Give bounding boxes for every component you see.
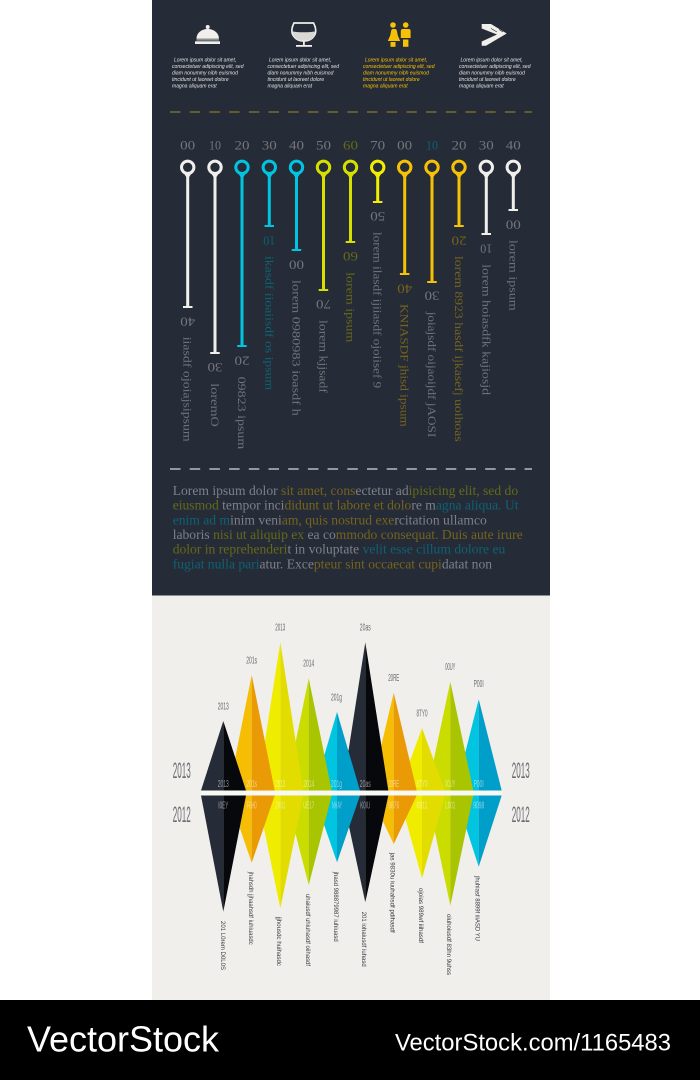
text block: column 1: consectetuer adipiscing elit, sed: [172, 64, 244, 70]
pin 11: lorem 8923 hasdf ijkasefj uoihoas: [452, 256, 466, 442]
pin chart: vertical timeline: [180, 138, 521, 450]
text block: column 1: magna aliquam erat: [172, 84, 217, 90]
pin 8: [370, 138, 385, 388]
labels: above peaks: 2013: [275, 622, 285, 634]
pin 1: 40: [180, 314, 195, 330]
pin 4: [262, 138, 277, 391]
pin 3: 09823 ipsum: [235, 377, 249, 450]
text block: column 3 highlighted: diam nonummy nibh euismod: [363, 70, 429, 76]
pin 3: 20: [234, 138, 250, 152]
labels: inside lower triangles: L001: [445, 800, 455, 812]
labels: inside upper triangles: 201s: [246, 779, 257, 790]
labels: rotated descriptions: 201 iohaiusdf iuhasd: [360, 912, 367, 967]
pin 10: joiajsdf oijaoijdf jAOSI: [425, 311, 439, 437]
text block: column 3 highlighted: [363, 58, 435, 90]
text block: column 4: consectetuer adipiscing elit, sed: [459, 64, 531, 70]
text block: column 2: magna aliquam erat: [268, 84, 313, 90]
labels: above peaks: 2013: [218, 702, 229, 712]
labels: inside lower triangles: 2X01: [275, 800, 285, 812]
panel: light chart: [152, 596, 550, 1000]
text block: paragraph: laboris nisi ut aliquip ex ea commodo consequat. Duis aute irure: [173, 527, 523, 542]
labels: above peaks: 201s: [246, 656, 257, 666]
labels: inside upper triangles: 20as: [360, 779, 371, 790]
text block: column 2: tincidunt ut laoreet dolore: [268, 77, 324, 83]
text block: column 4: magna aliquam erat: [459, 84, 504, 90]
pin 12: 10: [480, 242, 492, 257]
text block: column 2: [268, 58, 339, 90]
text block: column 1: [172, 58, 244, 90]
text block: column 1: tincidunt ut laoreet dolore: [172, 77, 229, 83]
labels: rotated descriptions: jas 9830u iuuhahsdf pdihasdf: [389, 852, 396, 933]
pin 10: 10: [426, 138, 438, 152]
pin 13: 40: [506, 138, 521, 152]
chart: lower triangles 2012: [201, 796, 502, 912]
pin 2: 10: [209, 138, 221, 152]
pin 1: [180, 138, 195, 442]
pin 2: loremO: [208, 383, 222, 427]
labels: rotated descriptions: jjhousdc huihasdc: [275, 916, 282, 967]
pin 6: 70: [316, 297, 331, 312]
panel: light chart: P00I: [474, 679, 484, 690]
pin 12: [479, 138, 494, 395]
labels: inside lower triangles: [218, 800, 484, 812]
pin 13: 00: [506, 217, 521, 232]
pin 6: 50: [316, 138, 331, 152]
pin 7: [343, 138, 358, 343]
pin 8: 50: [370, 209, 385, 224]
pin 4: 10: [263, 234, 275, 249]
labels: above peaks: 2014: [303, 658, 314, 670]
pin 5: lorem 0980983 ioasdf h: [290, 280, 304, 416]
panel: light chart: 2012: [512, 802, 530, 827]
labels: rotated descriptions: 201 L0rem D0L0S: [219, 921, 226, 970]
pin 13: lorem ipsum: [506, 240, 520, 311]
pin 5: 40: [289, 138, 304, 152]
text block: column 4: [459, 58, 531, 90]
text block: column 3 highlighted: consectetuer adipiscing elit, sed: [363, 64, 435, 70]
text block: paragraph: Lorem ipsum dolor sit amet, consectetur adipisicing elit, sed do: [173, 483, 518, 498]
pin 8: lorem ilasdf ijiiasdf ojoiisef 9: [371, 232, 385, 388]
pin 9: [397, 138, 412, 427]
pin 2: 30: [208, 360, 222, 375]
text block: column 1: Lorem ipsum dolor sit amet,: [174, 58, 236, 64]
pin 5: [289, 138, 304, 416]
pin 2: [208, 138, 222, 427]
icon: stairs: [482, 24, 507, 46]
labels: above peaks: 201g: [331, 692, 342, 704]
pin 11: [452, 138, 466, 442]
labels: above peaks: 8TY0: [416, 708, 428, 720]
pin 9: 40: [397, 281, 412, 296]
text block: column 1: diam nonummy nibh euismod: [172, 70, 238, 76]
pin 13: [506, 138, 521, 311]
text block: column 2: consectetuer adipiscing elit, sed: [268, 64, 339, 70]
labels: inside lower triangles: I0EY: [218, 800, 228, 812]
labels: above peaks: 00UY: [445, 662, 455, 673]
text block: column 3 highlighted: magna aliquam erat: [363, 84, 408, 90]
panel: light chart: 2012: [173, 802, 191, 827]
pin 5: 00: [289, 257, 304, 272]
pin 11: 20: [452, 138, 466, 152]
labels: rotated descriptions: ojoias 989wf iiihasdf: [417, 888, 424, 943]
pin 11: 20: [452, 234, 466, 249]
labels: rotated descriptions: oiuhoiusdf 83hn 9uhss: [445, 914, 452, 975]
pin 4: ikasdf iioaiisdf os ipsum: [262, 256, 276, 391]
footer url text: VectorStock.com/1165483: [395, 1030, 671, 1057]
pin 12: 30: [479, 138, 494, 152]
labels: inside lower triangles: UE17: [303, 800, 314, 812]
icon: wine glass: [292, 23, 316, 47]
text block: column 2: Lorem ipsum dolor sit amet,: [269, 58, 331, 64]
text block: column 2: diam nonummy nibh euismod: [268, 70, 334, 76]
labels: inside upper triangles: 2014: [303, 779, 314, 790]
labels: inside upper triangles: 20RE: [388, 779, 399, 790]
pin 7: 60: [343, 249, 358, 264]
pin 3: [234, 138, 250, 450]
labels: rotated descriptions: jhahsdh jjhaahsdf iuhiuasdc: [247, 871, 254, 945]
pin 6: lorem kjjsadf: [316, 320, 330, 393]
labels: rotated descriptions: [219, 852, 481, 975]
panel: light chart: 2013: [173, 758, 191, 783]
pin 9: KNIASDF jhisd ipsum: [398, 304, 412, 427]
labels: rotated descriptions: jhuhiasf 8899f iiiASD YU: [474, 875, 481, 941]
labels: inside lower triangles: 9098: [473, 800, 484, 812]
labels: rotated descriptions: uhaiusdf uhiuhasdf oiihasdf: [304, 894, 311, 966]
text block: paragraph: eiusmod tempor incididunt ut labore et dolore magna aliqua. Ut: [173, 498, 519, 513]
pin 4: 30: [262, 138, 277, 152]
text block: paragraph: dolor in reprehenderit in voluptate velit esse cillum dolore eu: [173, 542, 505, 557]
labels: inside upper triangles: 8TY0: [416, 779, 428, 790]
pin 3: 20: [234, 354, 250, 369]
labels: inside lower triangles: 0911: [416, 800, 428, 812]
pin 1: iiasdf ojoiajsipsum: [181, 337, 195, 442]
pin 7: lorem ipsum: [344, 272, 358, 343]
text block: column 4: diam nonummy nibh euismod: [459, 70, 525, 76]
labels: above peaks: 20as: [360, 622, 371, 634]
labels: inside lower triangles: NHAY: [332, 800, 342, 812]
text block: paragraph: fugiat nulla pariatur. Excepteur sint occaecat cupidatat non: [173, 556, 492, 571]
pin 8: 70: [370, 138, 385, 152]
icon: man and woman: [388, 22, 411, 47]
pin 10: 30: [424, 289, 440, 304]
text block: column 4: tincidunt ut laoreet dolore: [459, 77, 516, 83]
footer: watermark bar: [0, 1000, 700, 1080]
panel: light chart: P00I: [474, 779, 484, 790]
text block: paragraph: [173, 483, 523, 571]
labels: inside upper triangles: 2013: [218, 779, 229, 790]
panel: light chart: 2013: [512, 758, 530, 783]
labels: inside upper triangles: 201g: [331, 779, 342, 790]
footer logo text: VectorStock: [27, 1018, 220, 1060]
labels: inside upper triangles: [218, 779, 484, 790]
pin 9: 00: [397, 138, 412, 152]
pin 12: lorem hoiasdfk kajiosjd: [479, 264, 493, 395]
labels: inside lower triangles: F6H0: [247, 800, 257, 812]
panel: dark top: [152, 0, 550, 596]
labels: above peaks: [218, 622, 484, 720]
labels: inside upper triangles: 2013: [275, 779, 285, 790]
pin 1: 00: [180, 138, 195, 152]
labels: inside lower triangles: K0IU: [360, 800, 370, 812]
labels: rotated descriptions: jhasd 988879987 iuhiuasd: [332, 871, 339, 942]
text block: column 3 highlighted: tincidunt ut laoreet dolore: [363, 77, 420, 83]
chart: upper triangles 2013: [201, 642, 502, 790]
icon: cloche: [195, 25, 220, 44]
pin 10: [424, 138, 440, 437]
text block: column 3 highlighted: Lorem ipsum dolor sit amet,: [365, 58, 427, 64]
text block: paragraph: enim ad minim veniam, quis nostrud exercitation ullamco: [173, 512, 487, 527]
pin 6: [316, 138, 331, 393]
labels: above peaks: 20RE: [388, 673, 399, 684]
labels: inside lower triangles: 9876: [388, 800, 399, 812]
pin 7: 60: [343, 138, 358, 152]
text block: column 4: Lorem ipsum dolor sit amet,: [460, 58, 523, 64]
labels: inside upper triangles: 00UY: [445, 779, 455, 790]
